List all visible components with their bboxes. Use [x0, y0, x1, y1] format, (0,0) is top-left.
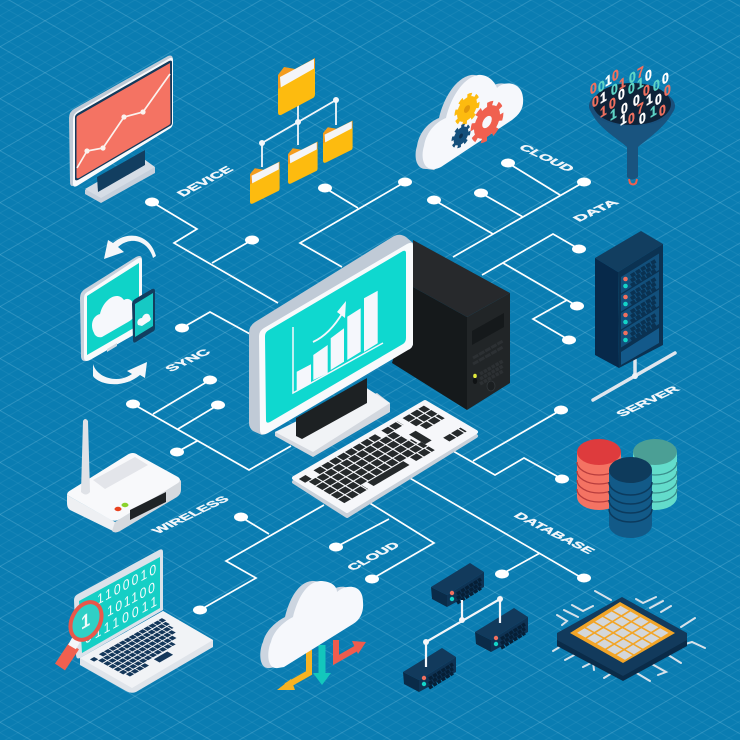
icon: data funnel with binary digits: 1	[600, 101, 607, 121]
icon: folder hierarchy	[250, 58, 353, 204]
icon: data funnel with binary digits: 0	[662, 68, 669, 88]
icon: data funnel with binary digits: 0	[618, 84, 625, 104]
icon: data funnel with binary digits: 0	[645, 65, 652, 85]
icon: data funnel with binary digits: 0	[609, 93, 616, 113]
icon: data funnel with binary digits: 0	[590, 78, 597, 98]
label: CLOUD bottom: CLOUD	[343, 540, 404, 573]
icon: data funnel with binary digits: 1	[600, 87, 607, 107]
icon: data funnel with binary digits: 0	[643, 80, 650, 100]
label: DATA: DATA	[569, 197, 623, 224]
icon: database cylinders	[577, 439, 677, 538]
icon: sync tablet and phone	[80, 236, 156, 384]
icon: data funnel with binary digits: 1	[605, 70, 612, 90]
icon: data funnel with binary digits: 0	[598, 76, 605, 96]
icon: data funnel with binary digits: 0	[633, 90, 640, 110]
gear: red	[473, 97, 501, 147]
icon: main desktop computer	[249, 235, 510, 516]
icon: laptop with binary screen and magnifier	[60, 549, 213, 693]
icon: data funnel with binary digits: 1	[610, 104, 617, 124]
icon: data funnel with binary digits: 0	[655, 89, 662, 109]
gear: yellow	[456, 90, 478, 128]
icon: cloud with gears	[416, 75, 523, 170]
icon: processor chip	[553, 591, 705, 681]
icon: data funnel with binary digits: 0	[653, 75, 660, 95]
connector wires	[133, 163, 584, 610]
icon: laptop with binary screen and magnifier: 1100010	[97, 560, 156, 608]
arrow: red	[336, 640, 366, 660]
icon: data funnel with binary digits: 0	[621, 98, 628, 118]
icon: data funnel with binary digits: 1	[650, 101, 657, 121]
label: CLOUD top: CLOUD	[515, 142, 578, 174]
label: SERVER: SERVER	[612, 384, 684, 419]
icon: data funnel with binary digits: 0	[639, 108, 646, 128]
icon: data funnel with binary digits: 7	[637, 62, 644, 82]
icon: cloud with arrows	[260, 581, 366, 690]
icon: data funnel with binary digits: 0	[612, 65, 619, 85]
keyboard	[294, 402, 476, 516]
icon: data funnel with binary digits: 1	[619, 73, 626, 93]
icon: data funnel with binary digits: 1	[620, 109, 627, 129]
icon: data funnel with binary digits: 1	[646, 89, 653, 109]
icon: data funnel with binary digits: 7	[637, 98, 644, 118]
cylinder: red	[577, 439, 621, 510]
arrow: yellow	[277, 650, 309, 690]
icon: data funnel with binary digits: 0	[629, 67, 636, 87]
arrow: sync bottom	[93, 362, 147, 384]
label: DATABASE: DATABASE	[510, 510, 598, 556]
icon: data funnel with binary digits: 0	[628, 108, 635, 128]
arrow: sync top	[104, 236, 156, 259]
icon: server rack	[593, 231, 675, 400]
icon: data funnel with binary digits: 1	[637, 73, 644, 93]
magnifier: 1	[81, 609, 91, 635]
icon: data funnel with binary digits	[589, 62, 675, 184]
icon: connected server boxes	[403, 563, 528, 692]
icon: data funnel with binary digits: 0	[659, 100, 666, 120]
arrow: teal	[313, 645, 331, 685]
icon: data funnel with binary digits: 0	[628, 78, 635, 98]
magnifier	[60, 597, 108, 667]
gear: navy	[453, 122, 469, 150]
icon: laptop with binary screen and magnifier: 101100	[107, 578, 155, 620]
cylinder: navy	[609, 457, 652, 538]
icon: data funnel with binary digits: 0	[611, 79, 618, 99]
cylinder: teal	[633, 439, 677, 510]
icon: laptop with binary screen and magnifier: 01110011	[85, 592, 157, 647]
label: WIRELESS: WIRELESS	[148, 494, 233, 536]
icon: data funnel with binary digits: 0	[592, 91, 599, 111]
icon: router	[67, 419, 181, 532]
monitor base and stand	[275, 393, 390, 457]
icon: device monitor with chart	[69, 56, 173, 203]
computer tower	[392, 240, 510, 410]
icon: data funnel with binary digits: 0	[664, 80, 671, 100]
label: DEVICE: DEVICE	[173, 164, 237, 199]
label: SYNC: SYNC	[161, 347, 215, 374]
monitor screen with bar chart	[249, 235, 413, 435]
wire end nodes	[126, 158, 591, 614]
